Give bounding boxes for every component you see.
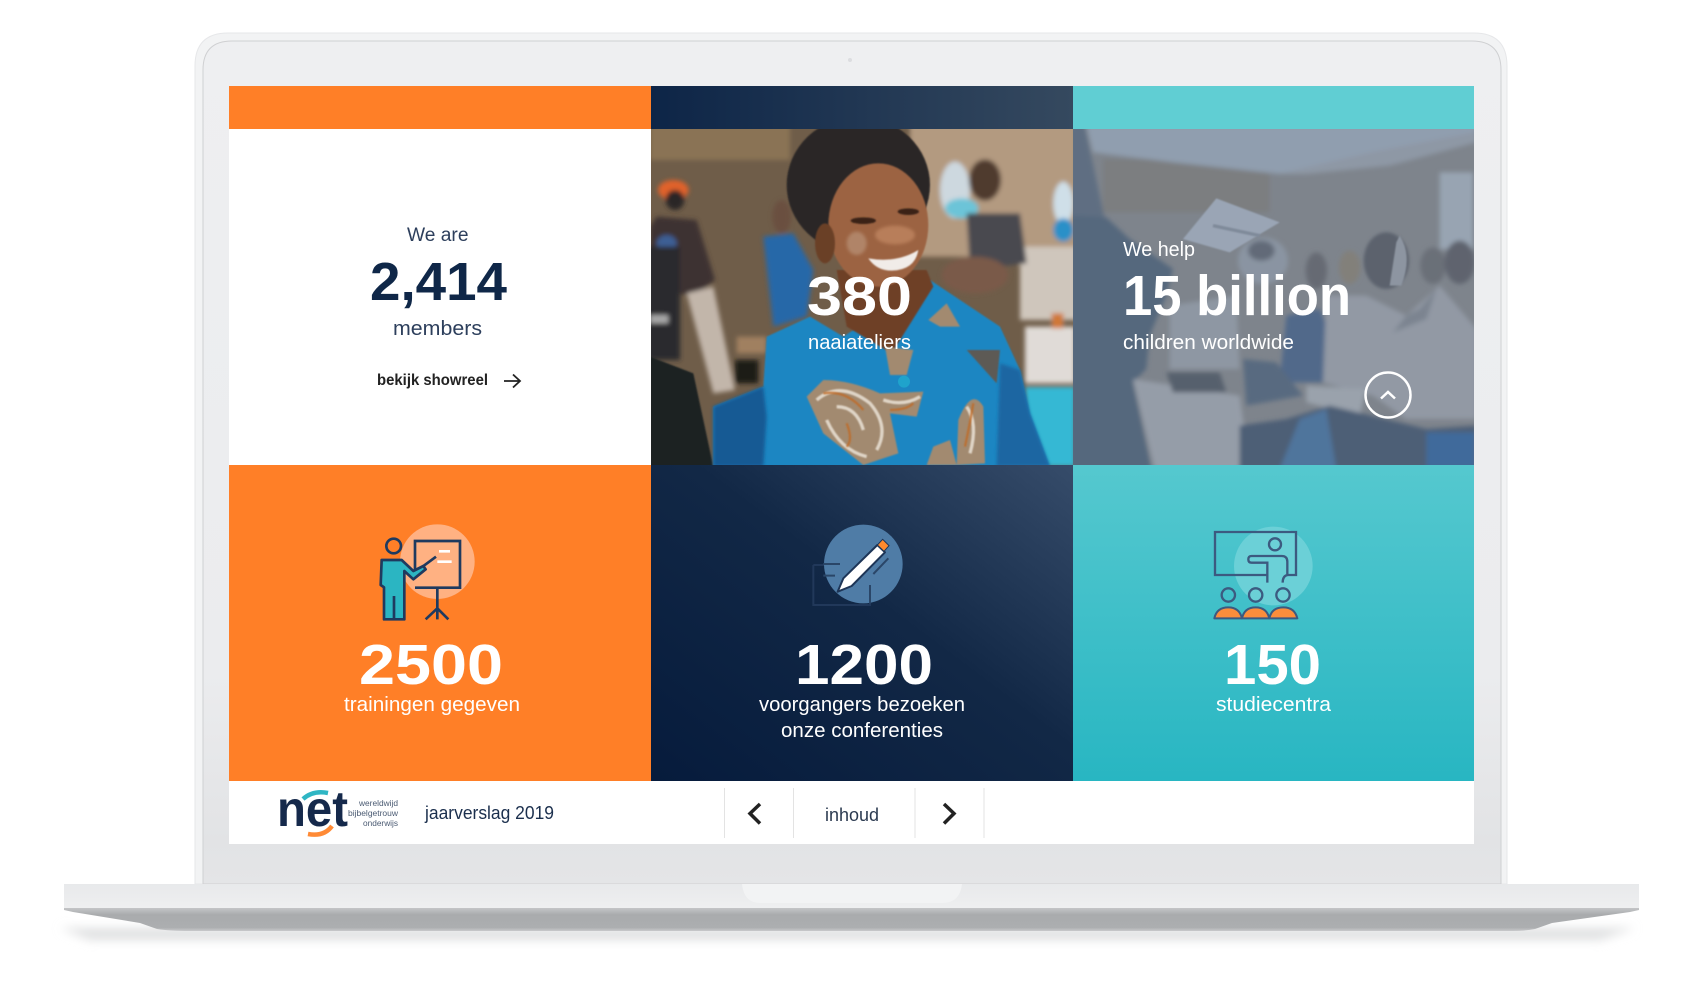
icon: pencil: [813, 525, 903, 605]
trackpad notch: [742, 884, 962, 903]
text: members: members: [393, 318, 482, 340]
panel: photo 380: [647, 117, 1077, 467]
number: 1200: 1200: [795, 633, 933, 697]
icon: previous: [750, 804, 760, 824]
logo arc: teal: [303, 792, 328, 799]
icon: next: [944, 804, 954, 824]
screen: [229, 86, 1476, 844]
logo tagline: [348, 799, 398, 828]
text: naaiateliers: naaiateliers: [808, 332, 911, 354]
panel: members: [229, 129, 651, 465]
photo: people in classroom with grey overlay: [1070, 126, 1476, 469]
icon: trainer at board: [381, 524, 475, 619]
footer bar: [229, 781, 1474, 844]
text: we help: We help: [1123, 239, 1195, 261]
panel: voorgangers: [651, 465, 1073, 781]
panel: top orange band: [229, 86, 651, 129]
logo arc: orange: [308, 826, 332, 835]
link: bekijk showreel: bekijk showreel: [377, 372, 488, 389]
text: trainingen gegeven: trainingen gegeven: [344, 694, 520, 716]
number: 150: 150: [1224, 633, 1321, 697]
laptop lid: [195, 33, 1507, 884]
panel: photo 15 billion: [1070, 126, 1476, 469]
icon: classroom: [1214, 527, 1313, 618]
logo tagline: wereldwijd: [358, 799, 398, 808]
number: 2,414: 2,414: [370, 252, 507, 312]
text: we are: We are: [407, 225, 468, 246]
logo: net: net: [277, 781, 348, 837]
panel: studiecentra: [1073, 465, 1474, 781]
lid bezel: [203, 41, 1501, 884]
laptop base top: [64, 884, 1639, 908]
logo tagline: onderwijs: [363, 819, 398, 828]
number: 2500: 2500: [359, 633, 503, 697]
face: [828, 163, 928, 287]
panel: trainingen: [229, 465, 651, 781]
logo: net: [277, 781, 398, 837]
smile: [868, 250, 918, 271]
text: voorgangers bezoeken: voorgangers bezoeken: [759, 694, 965, 716]
camera dot: [848, 58, 852, 62]
panel: top teal band: [1073, 86, 1474, 129]
number: 15 billion: 15 billion: [1123, 264, 1351, 328]
logo tagline: bijbelgetrouw: [348, 809, 398, 818]
text: inhoud: inhoud: [825, 805, 879, 825]
text: onze conferenties: onze conferenties: [781, 720, 943, 742]
icon: up button: [1366, 372, 1410, 418]
text: children worldwide: children worldwide: [1123, 332, 1294, 354]
panel: top navy band: [651, 86, 1073, 129]
neck: [837, 270, 933, 353]
text: jaarverslag 2019: jaarverslag 2019: [424, 803, 554, 823]
icon: arrow: [504, 374, 520, 388]
hair: [786, 129, 931, 240]
dress pattern: [807, 303, 1000, 465]
laptop base front: [64, 908, 1639, 931]
laptop shadow: [60, 928, 1635, 940]
text: studiecentra: studiecentra: [1216, 694, 1332, 716]
photo: smiling woman in blue: [647, 117, 1077, 467]
number: 380: 380: [807, 265, 912, 327]
